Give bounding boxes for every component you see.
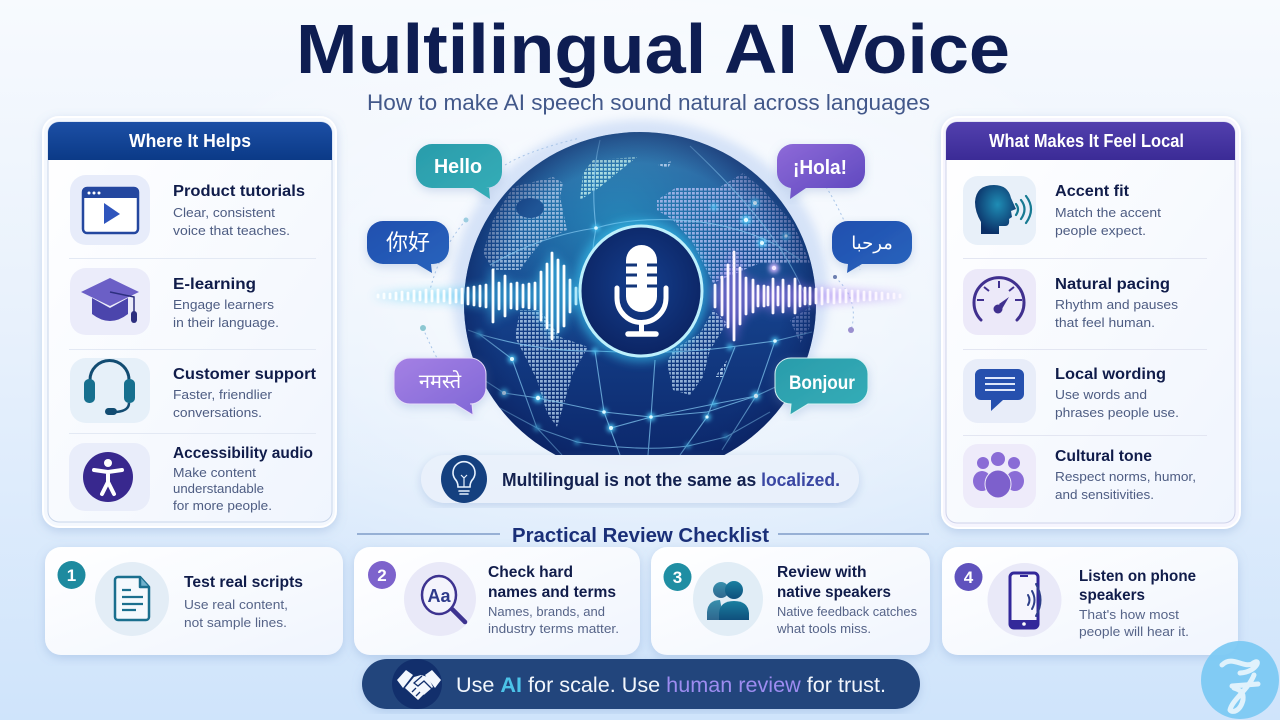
badge 4: 4 bbox=[964, 568, 974, 587]
subtitle: How to make AI speech sound natural across languages bbox=[367, 90, 930, 115]
badge 1: 1 bbox=[67, 566, 76, 585]
step card 2: check hard names and terms bbox=[354, 547, 640, 655]
item: cultural tone: Respect norms, humor, bbox=[1055, 469, 1196, 484]
watermark logo bbox=[1201, 641, 1279, 719]
item: e-learning: E-learning bbox=[173, 276, 256, 293]
step card 2: check hard names and terms: names and terms bbox=[488, 584, 616, 601]
item: accent fit: Accent fit bbox=[1055, 183, 1130, 200]
badge 2: 2 bbox=[377, 566, 387, 585]
item: natural pacing: Natural pacing bbox=[1055, 276, 1170, 293]
panel: what makes it feel local bbox=[942, 117, 1240, 528]
item: e-learning bbox=[70, 268, 279, 335]
item: accessibility audio: Accessibility audio bbox=[173, 445, 313, 462]
step card 1: test real scripts bbox=[45, 547, 343, 655]
speech bubble: marhaba bbox=[832, 221, 912, 273]
step card 3: review with native speakers: native speakers bbox=[777, 584, 891, 601]
icon: graduation cap bbox=[81, 278, 139, 323]
globe bbox=[420, 120, 860, 476]
step card 3: review with native speakers bbox=[651, 547, 930, 655]
icon: headset bbox=[84, 360, 135, 415]
item: local wording: phrases people use. bbox=[1055, 405, 1179, 420]
icon: two people bbox=[707, 581, 749, 620]
item: product tutorials: Clear, consistent bbox=[173, 205, 275, 220]
item: natural pacing: Rhythm and pauses bbox=[1055, 297, 1179, 312]
callout: multilingual is not localized: Multilingual is not the same as localized. bbox=[502, 470, 840, 490]
icon: group of people bbox=[973, 452, 1024, 498]
panel header: where it helps: Where It Helps bbox=[129, 131, 251, 151]
step card 1: test real scripts: not sample lines. bbox=[184, 615, 287, 630]
banner: use AI for scale bbox=[362, 659, 920, 709]
badge 2 bbox=[368, 561, 396, 589]
item: local wording: Use words and bbox=[1055, 387, 1147, 402]
panel header: what makes it feel local bbox=[946, 122, 1235, 160]
step card 2: check hard names and terms: Check hard bbox=[488, 564, 573, 581]
item: customer support: Faster, friendlier bbox=[173, 387, 273, 402]
item: local wording bbox=[963, 359, 1179, 423]
banner: use AI for scale: Use AI for scale. Use human review for trust. bbox=[456, 674, 886, 697]
item: cultural tone: and sensitivities. bbox=[1055, 487, 1154, 502]
step card 3: review with native speakers: Review with bbox=[777, 564, 866, 581]
item: customer support bbox=[70, 358, 317, 423]
step card 1: test real scripts: Use real content, bbox=[184, 597, 288, 612]
icon: speaking head bbox=[975, 185, 1031, 234]
speech bubble: namaste: नमस्ते bbox=[419, 370, 462, 393]
dotted continents bbox=[483, 157, 810, 427]
step card 4: listen on phone speakers: people will hear it. bbox=[1079, 624, 1189, 639]
icon: document bbox=[115, 577, 149, 620]
icon: handshake bbox=[392, 659, 442, 709]
badge 1 bbox=[58, 561, 86, 589]
step card 3: review with native speakers: Native feedback catches bbox=[777, 604, 917, 619]
badge 4 bbox=[954, 563, 982, 591]
orbit lines outside globe bbox=[423, 138, 860, 400]
speech bubble: namaste bbox=[394, 358, 486, 415]
network nodes bbox=[476, 199, 790, 448]
icon: light bulb bbox=[441, 455, 487, 503]
speech bubble: nihao: 你好 bbox=[386, 230, 430, 255]
item: product tutorials: Product tutorials bbox=[173, 183, 305, 200]
item: accent fit: people expect. bbox=[1055, 223, 1146, 238]
panel header: what makes it feel local: What Makes It Feel Local bbox=[989, 131, 1184, 151]
speech bubble: marhaba: مرحبا bbox=[851, 233, 893, 254]
icon: accessibility figure bbox=[83, 452, 133, 502]
title: Multilingual AI Voice bbox=[296, 10, 1010, 88]
item: e-learning: in their language. bbox=[173, 315, 279, 330]
speech bubble: hello: Hello bbox=[434, 156, 482, 178]
icon: magnifier with Aa bbox=[422, 576, 465, 622]
item: local wording: Local wording bbox=[1055, 366, 1166, 383]
icon: chat bubble bbox=[975, 369, 1024, 411]
speech bubble: hola bbox=[777, 144, 865, 199]
latitude and longitude grid bbox=[468, 140, 812, 455]
badge 3: 3 bbox=[673, 568, 682, 587]
speech bubble: bonjour: Bonjour bbox=[789, 373, 856, 394]
panel: where it helps bbox=[43, 117, 336, 527]
soundwave: right bbox=[715, 252, 900, 340]
icon: magnifier with Aa: Aa bbox=[427, 586, 451, 606]
item: natural pacing bbox=[963, 269, 1179, 335]
item: accessibility audio bbox=[69, 443, 313, 513]
step card 4: listen on phone speakers bbox=[942, 547, 1238, 655]
step card 2: check hard names and terms: industry terms matter. bbox=[488, 621, 619, 636]
icon: phone with sound bbox=[1010, 573, 1040, 628]
step card 4: listen on phone speakers: Listen on phone bbox=[1079, 568, 1196, 585]
item: e-learning: Engage learners bbox=[173, 297, 275, 312]
item: accent fit: Match the accent bbox=[1055, 205, 1161, 220]
speech bubble: nihao bbox=[367, 221, 449, 273]
icon: video player bbox=[83, 188, 138, 233]
speech bubble: hello bbox=[416, 144, 502, 199]
step card 2: check hard names and terms: Names, brands, and bbox=[488, 604, 605, 619]
item: product tutorials: voice that teaches. bbox=[173, 223, 290, 238]
item: cultural tone bbox=[963, 444, 1196, 508]
step card 3: review with native speakers: what tools miss. bbox=[776, 621, 871, 636]
badge 3 bbox=[664, 563, 692, 591]
item: cultural tone: Cultural tone bbox=[1055, 448, 1152, 465]
item: natural pacing: that feel human. bbox=[1055, 315, 1155, 330]
microphone badge bbox=[574, 220, 708, 362]
item: accessibility audio: understandable bbox=[173, 481, 264, 496]
speech bubble: hola: ¡Hola! bbox=[793, 157, 847, 179]
item: customer support: Customer support bbox=[173, 366, 317, 383]
soundwave: left bbox=[378, 253, 576, 339]
icon: speedometer bbox=[974, 278, 1024, 320]
item: accessibility audio: Make content bbox=[173, 465, 256, 480]
step card 1: test real scripts: Test real scripts bbox=[184, 574, 303, 591]
step card 4: listen on phone speakers: That's how most bbox=[1079, 607, 1179, 622]
step card 4: listen on phone speakers: speakers bbox=[1079, 587, 1145, 604]
heading: practical review checklist: Practical Review Checklist bbox=[512, 525, 769, 547]
icon: microphone bbox=[617, 245, 666, 334]
item: accent fit bbox=[963, 176, 1161, 245]
callout: multilingual is not localized bbox=[421, 455, 859, 503]
speech bubble: bonjour bbox=[775, 358, 868, 415]
panel header: where it helps bbox=[48, 122, 332, 160]
item: product tutorials bbox=[70, 175, 305, 245]
item: customer support: conversations. bbox=[173, 405, 262, 420]
item: accessibility audio: for more people. bbox=[173, 498, 272, 513]
